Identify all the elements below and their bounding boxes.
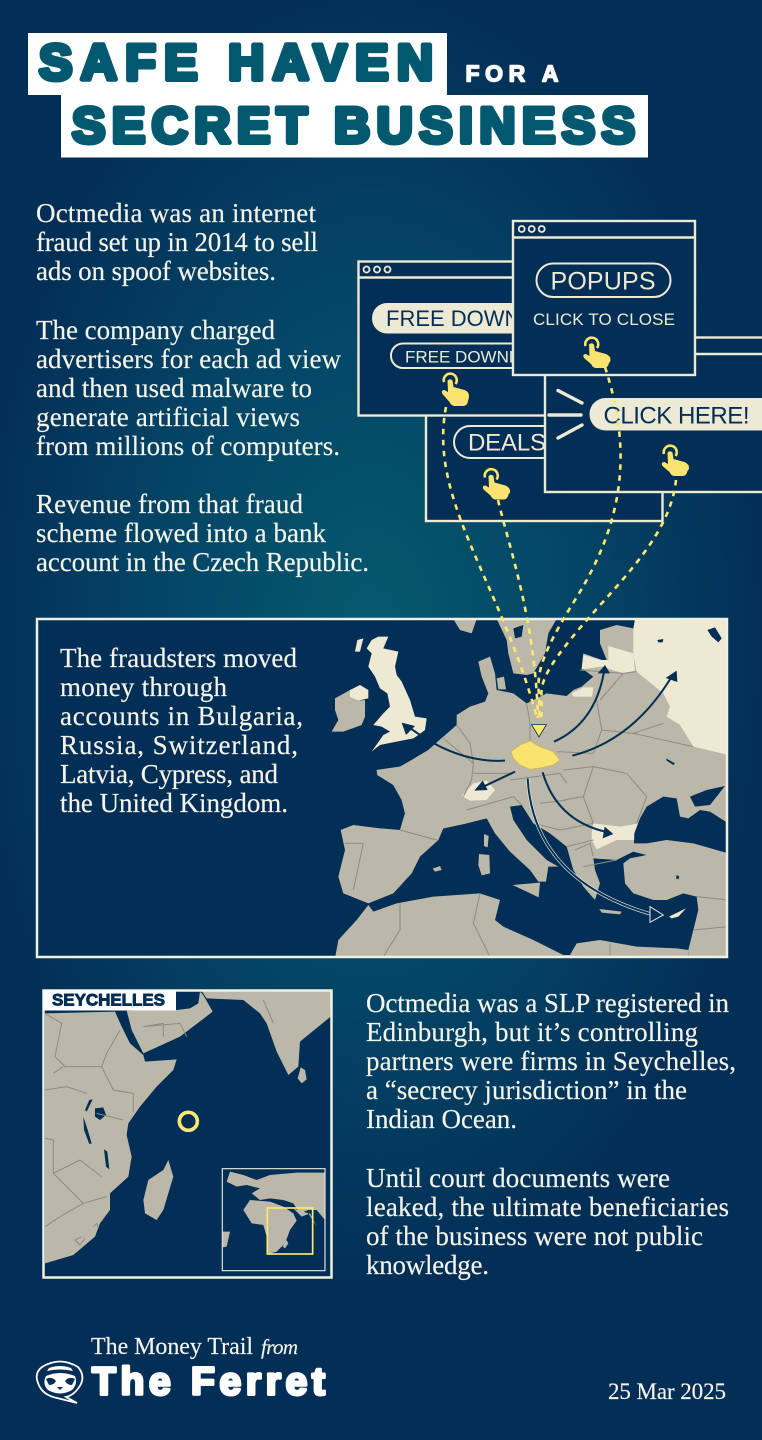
icon: ferret logo [37,1362,82,1403]
arrow: to Cyprus [528,778,663,922]
outlined button: FREE DOWNLOAD [405,348,555,366]
panel: Europe map [37,619,728,958]
text block: Seychelles explanation: knowledge. [366,1250,489,1280]
text block: Seychelles explanation: partners were firms in Seychelles, [366,1046,736,1076]
arrow: to Bulgaria [543,772,613,838]
text block: Octmedia intro: Octmedia was an internet [36,198,316,228]
panel: free download window [358,262,580,416]
Latvia, highlighted [582,646,635,673]
text block: fraudsters: accounts in Bulgaria, [60,701,303,731]
text block: Octmedia intro: scheme flowed into a bank [36,518,326,548]
text block: Octmedia intro: from millions of computers. [36,431,340,461]
text block: Octmedia intro: generate artificial views [36,402,300,432]
close label: CLICK TO CLOSE [533,310,675,329]
text block: Octmedia intro: advertisers for each ad view [36,344,342,374]
arrow: to Russia [572,671,677,756]
text block: Seychelles explanation: Octmedia was a SLP registered in [366,988,730,1018]
footer: the money trail: The Money Trail [91,1334,253,1360]
arrow: to United Kingdom [402,723,505,761]
panel: popups window [513,221,695,375]
text block: fraudsters: the United Kingdom. [60,788,288,818]
text block: Seychelles explanation: Until court documents were [366,1163,670,1193]
text block: Seychelles explanation: Indian Ocean. [366,1104,517,1134]
panel: Seychelles map [44,990,332,1278]
icon: hand on free download [442,374,469,406]
text block: Seychelles explanation: Edinburgh, but it’s controlling [366,1017,698,1047]
title [28,33,648,158]
text block: Octmedia intro: The company charged [36,315,276,345]
title: SAFE HAVEN [39,34,433,90]
text block: Octmedia intro: account in the Czech Republic. [36,547,369,577]
text block: fraudsters [60,643,303,818]
text block: fraudsters: money through [60,672,228,702]
panel: click here window [545,338,762,492]
text block: fraudsters: The fraudsters moved [60,643,298,673]
Cyprus, highlighted [669,908,686,918]
text block: Seychelles explanation: of the business were not public [366,1221,703,1251]
text block: Seychelles explanation: leaked, the ultimate beneficiaries [366,1192,729,1222]
popups button: POPUPS [550,268,656,296]
Czech Republic, highlighted [511,741,560,769]
icon: hand on popups [583,338,611,368]
text block: fraudsters: Russia, Switzerland, [60,730,298,760]
Russia, highlighted [633,619,728,755]
label: Seychelles: SEYCHELLES [52,990,165,1010]
burst lines [549,390,582,438]
deals button [454,426,584,458]
popups button [536,264,670,297]
date: 25 Mar 2025 [608,1379,726,1404]
deals button: DEALS [468,430,546,456]
text block: Octmedia intro: fraud set up in 2014 to sell [36,227,318,257]
title: FOR A [466,60,558,86]
Switzerland, highlighted [462,781,495,801]
text block: Octmedia intro: Revenue from that fraud [36,489,304,519]
text block: Seychelles explanation [366,988,736,1280]
arrow: to Switzerland [474,772,515,791]
dashed click paths [443,367,676,718]
borders [345,670,728,957]
title: SECRET BUSINESS [72,98,635,154]
UK, highlighted [367,637,427,752]
arrow: to Latvia [554,665,610,742]
text block: Octmedia intro: ads on spoof websites. [36,256,276,286]
footer: the money trail: from [261,1335,298,1359]
icon: hand on click here [662,446,689,476]
inset locator map [222,1169,325,1271]
Black Sea and inland water [634,797,728,853]
panel: deals window [426,400,662,521]
filled button: FREE DOWNLOAD [386,306,580,331]
arrow: into Czech Republic [532,724,546,737]
footer: the ferret wordmark: The Ferret [92,1360,325,1404]
Bulgaria, highlighted [592,823,639,849]
text block: Octmedia intro [36,198,369,577]
icon: hand on deals [483,469,510,500]
click here button: CLICK HERE! [604,402,750,430]
text block: Seychelles explanation: a “secrecy jurisdiction” in the [366,1075,687,1105]
text block: fraudsters: Latvia, Cypress, and [60,759,278,789]
text block: Octmedia intro: and then used malware to [36,373,312,403]
